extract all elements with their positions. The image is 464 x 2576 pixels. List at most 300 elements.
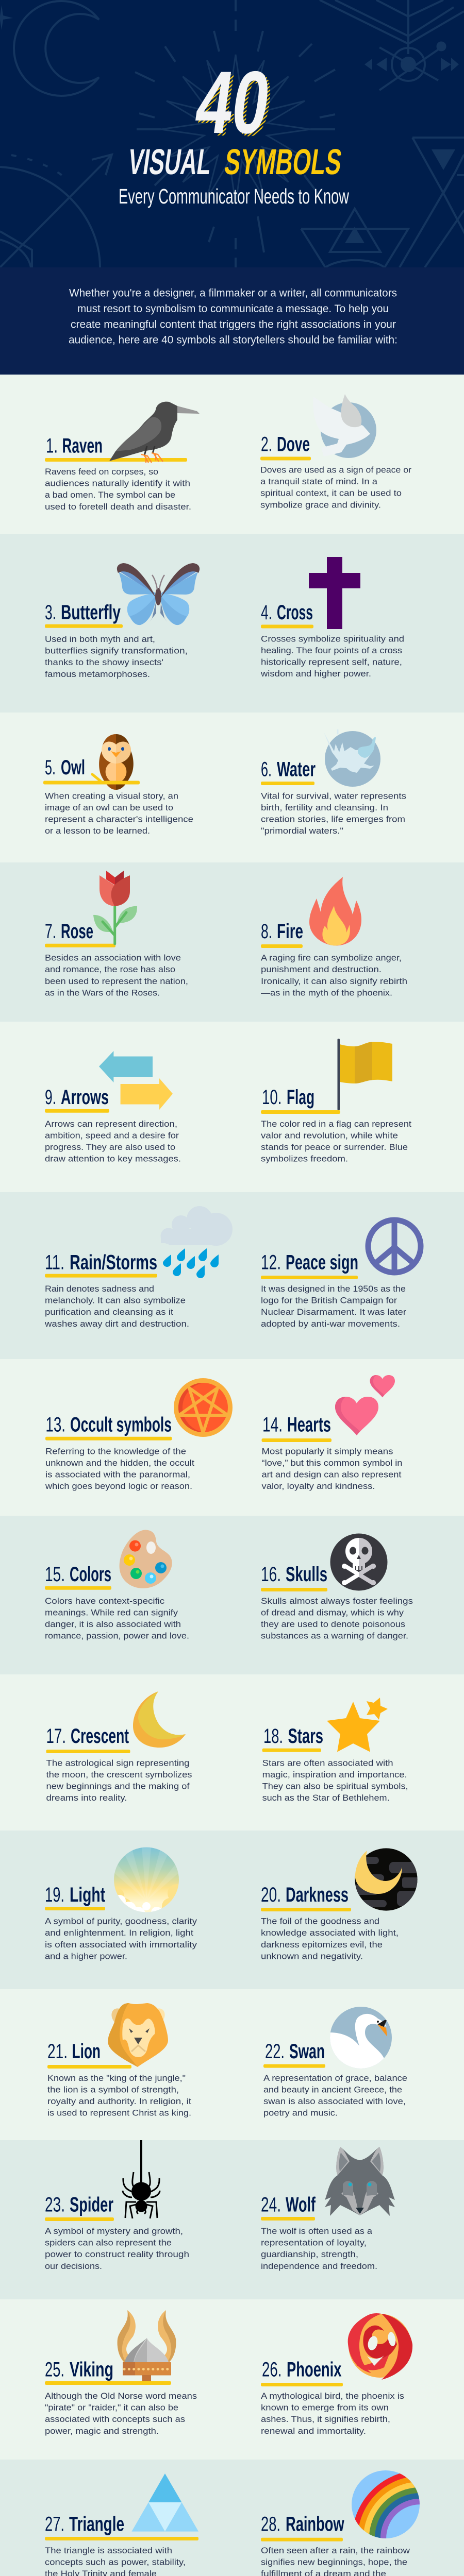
- body text: [261, 1284, 406, 1329]
- body text: “love,” but this common symbol in: [262, 1458, 402, 1468]
- panel: 1. Raven: [45, 402, 200, 512]
- body text: When creating a visual story, an: [45, 791, 178, 801]
- body text: [261, 1596, 413, 1641]
- heading: 6. Water: Water: [277, 758, 316, 781]
- body text: butterflies signify transformation,: [45, 646, 188, 656]
- body text: Nuclear Disarmament. It was later: [261, 1307, 406, 1317]
- body text: Arrows can represent direction,: [45, 1119, 177, 1129]
- heading: 21. Lion: Lion: [72, 2040, 101, 2063]
- body text: famous metamorphoses.: [45, 669, 150, 679]
- body text: A symbol of mystery and growth,: [45, 2226, 183, 2236]
- body text: [261, 953, 407, 997]
- panel: 23. Spider: [45, 2140, 189, 2271]
- heading: 11. Rain/Storms: Rain/Storms: [70, 1251, 157, 1274]
- heading: 6. Water: [261, 758, 316, 781]
- heading: 23. Spider: [45, 2194, 113, 2216]
- heading: 5. Owl: 5.: [45, 756, 56, 779]
- body text: stands for peace or surrender. Blue: [261, 1142, 408, 1152]
- icon: light: [108, 1847, 186, 1921]
- underline: [260, 456, 311, 461]
- body text: which goes beyond logic or reason.: [45, 1481, 192, 1491]
- heading: 12. Peace sign: Peace sign: [286, 1251, 358, 1274]
- body text: Colors have context-specific: [45, 1596, 165, 1606]
- panel: 18. Stars: [262, 1698, 408, 1803]
- body text: [45, 634, 188, 679]
- body text: magic, inspiration and importance.: [262, 1770, 407, 1780]
- body text: or a lesson to be learned.: [45, 826, 150, 836]
- heading: 27. Triangle: [45, 2513, 124, 2535]
- body text: The astrological sign representing: [46, 1758, 190, 1768]
- heading: 27. Triangle: 27.: [45, 2513, 64, 2535]
- underline: [45, 1586, 111, 1590]
- heading: 5. Owl: [45, 756, 85, 779]
- heading: 13. Occult symbols: [45, 1414, 172, 1436]
- icon: lion: [108, 2003, 168, 2067]
- panel: 6. Water: [261, 730, 406, 836]
- body text: Rain denotes sadness and: [45, 1284, 154, 1294]
- icon: wolf: [325, 2147, 395, 2216]
- heading: 14. Hearts: Hearts: [287, 1414, 331, 1436]
- heading: 14. Hearts: [262, 1414, 331, 1436]
- heading: 2. Dove: [261, 433, 310, 455]
- heading: 8. Fire: [261, 920, 303, 943]
- heading: 17. Crescent: Crescent: [71, 1725, 129, 1748]
- heading: 6. Water: 6.: [261, 758, 272, 781]
- body text: a bad omen. The symbol can be: [45, 490, 175, 500]
- intro panel: must resort to symbolism to communicate a message. To help you: [77, 303, 389, 315]
- heading: 20. Darkness: [261, 1884, 349, 1906]
- body text: and a higher power.: [45, 1951, 127, 1961]
- body text: The wolf is often used as a: [261, 2226, 373, 2236]
- heading: 4. Cross: 4.: [261, 601, 272, 624]
- body text: The triangle is associated with: [45, 2546, 172, 2555]
- heading: 7. Rose: 7.: [45, 920, 56, 943]
- underline: [261, 2383, 343, 2386]
- body text: darkness epitomizes evil, the: [261, 1940, 383, 1950]
- body text: [262, 1446, 402, 1491]
- body text: romance, passion, power and love.: [45, 1631, 189, 1641]
- heading: 13. Occult symbols: 13.: [45, 1414, 65, 1436]
- body text: Skulls almost always foster feelings: [261, 1596, 413, 1606]
- body text: the moon, the crescent symbolizes: [46, 1770, 192, 1780]
- body text: Known as the "king of the jungle,": [47, 2073, 186, 2083]
- panel: 28. Rainbow: [261, 2470, 464, 2576]
- body text: concepts such as power, stability,: [45, 2557, 186, 2567]
- body text: Crosses symbolize spirituality and: [261, 634, 404, 643]
- heading: 9. Arrows: Arrows: [61, 1086, 109, 1109]
- icon: phoenix: [348, 2313, 412, 2380]
- body text: our decisions.: [45, 2261, 102, 2271]
- body text: [45, 1446, 194, 1491]
- body text: A symbol of purity, goodness, clarity: [45, 1917, 197, 1926]
- heading: 2. Dove: 2.: [261, 433, 272, 455]
- body text: Used in both myth and art,: [45, 634, 155, 644]
- panel: 22. Swan: [263, 2007, 407, 2118]
- icon: fire: [309, 877, 361, 946]
- body text: ambition, speed and a desire for: [45, 1130, 179, 1140]
- body text: as in the Wars of the Roses.: [45, 988, 160, 997]
- heading: 14. Hearts: 14.: [262, 1414, 283, 1436]
- body text: They can also be spiritual symbols,: [262, 1782, 408, 1791]
- body text: meanings. While red can signify: [45, 1607, 178, 1617]
- body text: represent a character's intelligence: [45, 815, 193, 824]
- body text: and romance, the rose has also: [45, 964, 175, 974]
- underline: [262, 1438, 332, 1442]
- heading: 26. Phoenix: 26.: [262, 2358, 281, 2381]
- heading: 22. Swan: [265, 2040, 325, 2063]
- heading: 22. Swan: 22.: [265, 2040, 285, 2063]
- body text: the lion is a symbol of strength,: [47, 2084, 179, 2094]
- heading: 16. Skulls: 16.: [261, 1563, 281, 1586]
- body text: used to foretell death and disaster.: [45, 502, 191, 512]
- body text: valor and revolution, while white: [261, 1130, 398, 1140]
- heading: 17. Crescent: [46, 1725, 129, 1748]
- heading: 28. Rainbow: 28.: [261, 2513, 280, 2535]
- heading: 25. Viking: [45, 2358, 113, 2381]
- body text: [261, 1119, 411, 1164]
- body text: [45, 2226, 189, 2271]
- underline: [45, 624, 123, 628]
- icon: swan: [330, 2007, 392, 2071]
- underline: [261, 2538, 343, 2541]
- body text: —as in the myth of the phoenix.: [261, 988, 392, 997]
- body text: and enlightenment. In religion, light: [45, 1928, 193, 1938]
- body text: [261, 1917, 399, 1961]
- icon: crescent moon: [133, 1691, 186, 1748]
- heading: 13. Occult symbols: Occult symbols: [70, 1414, 172, 1436]
- underline: [43, 781, 140, 784]
- body text: Vital for survival, water represents: [261, 791, 406, 801]
- body text: Referring to the knowledge of the: [45, 1446, 186, 1456]
- title: visual symbols: [126, 141, 344, 182]
- body text: The color red in a flag can represent: [261, 1119, 411, 1129]
- heading: 4. Cross: Cross: [277, 601, 313, 624]
- panel: 17. Crescent: [46, 1691, 192, 1803]
- body text: a tranquil state of mind. In a: [260, 477, 378, 486]
- intro panel: [0, 267, 464, 375]
- body text: wisdom and higher power.: [260, 669, 371, 679]
- heading: 8. Fire: Fire: [277, 920, 303, 943]
- heading: 20. Darkness: 20.: [261, 1884, 281, 1906]
- body text: [44, 1284, 189, 1329]
- body text: [47, 2073, 191, 2118]
- heading: 24. Wolf: 24.: [261, 2194, 281, 2216]
- heading: 26. Phoenix: Phoenix: [287, 2358, 341, 2381]
- heading: 1. Raven: [46, 435, 103, 457]
- heading: 3. Butterfly: 3.: [45, 601, 56, 624]
- body text: of dread and dismay, which is why: [261, 1607, 404, 1617]
- heading: 18. Stars: 18.: [263, 1725, 283, 1748]
- underline: [263, 2064, 325, 2068]
- body text: [261, 2391, 404, 2436]
- body text: logo for the British Campaign for: [261, 1296, 397, 1306]
- heading: 2. Dove: Dove: [277, 433, 310, 455]
- body text: royalty and authority. In religion, it: [47, 2096, 191, 2106]
- underline: [262, 1749, 321, 1752]
- heading: 23. Spider: Spider: [70, 2194, 113, 2216]
- body text: poetry and music.: [263, 2108, 338, 2118]
- icon: hearts: [335, 1375, 395, 1435]
- icon: palette: [120, 1530, 172, 1588]
- heading: 10. Flag: 10.: [262, 1086, 281, 1109]
- body text: such as the Star of Bethlehem.: [262, 1793, 390, 1803]
- body text: "pirate" or "raider," it can also be: [45, 2403, 178, 2413]
- heading: 9. Arrows: 9.: [45, 1086, 56, 1109]
- body text: image of an owl can be used to: [45, 803, 173, 812]
- icon: flag: [337, 1039, 392, 1110]
- heading: 11. Rain/Storms: [45, 1251, 157, 1274]
- body text: [45, 2546, 186, 2576]
- body text: and beauty in ancient Greece, the: [263, 2084, 402, 2094]
- body text: thanks to the showy insects': [45, 657, 163, 667]
- underline: [45, 458, 187, 462]
- icon: spider: [123, 2140, 160, 2218]
- body text: Although the Old Norse word means: [45, 2391, 197, 2401]
- body text: substances as a warning of danger.: [261, 1631, 408, 1641]
- heading: 17. Crescent: 17.: [46, 1725, 66, 1748]
- heading: 15. Colors: 15.: [45, 1563, 65, 1586]
- underline: [46, 1750, 130, 1753]
- body text: is often associated with immortality: [45, 1940, 197, 1950]
- icon: stars: [327, 1698, 388, 1752]
- intro panel: create meaningful content that triggers the right associations in your: [71, 318, 396, 330]
- heading: 23. Spider: 23.: [45, 2194, 65, 2216]
- heading: 19. Light: 19.: [45, 1884, 64, 1906]
- panel: 27. Triangle: [45, 2473, 198, 2576]
- heading: 12. Peace sign: [261, 1251, 358, 1274]
- body text: Often seen after a rain, the rainbow: [261, 2546, 410, 2555]
- title: visual symbols: VISUAL: [126, 141, 214, 182]
- body text: Ironically, it can also signify rebirth: [261, 976, 407, 986]
- body text: creation stories, life emerges from: [261, 815, 405, 824]
- heading: 16. Skulls: [261, 1563, 327, 1586]
- underline: [261, 1908, 351, 1911]
- body text: It was designed in the 1950s as the: [261, 1284, 406, 1294]
- body text: "primordial waters.": [261, 826, 343, 836]
- body text: A representation of grace, balance: [263, 2073, 407, 2083]
- body text: [260, 634, 404, 679]
- underline: [47, 2065, 131, 2069]
- heading: 1. Raven: Raven: [62, 435, 103, 457]
- underline: [261, 944, 303, 948]
- heading: 8. Fire: 8.: [261, 920, 272, 943]
- panel: 8. Fire: [261, 877, 407, 997]
- header background: [0, 0, 464, 267]
- body text: independence and freedom.: [261, 2261, 377, 2271]
- heading: 7. Rose: [45, 920, 93, 943]
- heading: 18. Stars: Stars: [288, 1725, 323, 1748]
- body text: power to construct reality through: [45, 2249, 189, 2259]
- heading: 4. Cross: [261, 601, 313, 624]
- body text: swan is also associated with love,: [263, 2096, 406, 2106]
- body text: ashes. Thus, it signifies rebirth,: [261, 2414, 390, 2424]
- title: 40: 40: [193, 56, 279, 155]
- body text: [45, 1917, 197, 1961]
- subtitle: Every Communicator Needs to Know: [119, 184, 349, 208]
- icon: owl: [92, 734, 134, 790]
- heading: 3. Butterfly: [45, 601, 121, 624]
- heading: 1. Raven: 1.: [46, 435, 58, 457]
- icon: dove: [313, 394, 376, 458]
- panel: 19. Light: [45, 1847, 197, 1961]
- body text: audiences naturally identify it with: [45, 479, 190, 488]
- heading: 15. Colors: [45, 1563, 111, 1586]
- body text: danger, it is also associated with: [45, 1619, 181, 1629]
- body text: symbolize grace and divinity.: [260, 500, 381, 510]
- body text: renewal and immortality.: [261, 2426, 366, 2436]
- body text: [261, 791, 406, 836]
- body text: birth, fertility and cleansing. In: [261, 803, 388, 812]
- panel: 3. Butterfly: [45, 563, 200, 679]
- panel: 25. Viking: [45, 2310, 197, 2436]
- body text: known to emerge from its own: [261, 2403, 389, 2413]
- underline: [45, 2381, 171, 2385]
- heading: 27. Triangle: Triangle: [69, 2513, 124, 2535]
- body text: punishment and destruction.: [261, 964, 382, 974]
- body text: [45, 467, 191, 512]
- underline: [45, 944, 115, 947]
- body text: symbolizes freedom.: [261, 1154, 348, 1164]
- body text: valor, loyalty and kindness.: [262, 1481, 375, 1491]
- heading: 20. Darkness: Darkness: [286, 1884, 349, 1906]
- icon: butterfly: [117, 563, 200, 625]
- heading: 9. Arrows: [45, 1086, 109, 1109]
- icon: rose: [93, 871, 137, 944]
- panel: 24. Wolf: [261, 2147, 395, 2271]
- underline: [45, 1437, 172, 1440]
- icon: rain cloud: [161, 1206, 233, 1278]
- title: visual symbols: SYMBOLS: [222, 141, 344, 182]
- body text: unknown and negativity.: [261, 1951, 363, 1961]
- heading: 25. Viking: 25.: [45, 2358, 64, 2381]
- body text: [46, 1758, 192, 1803]
- body text: Stars are often associated with: [262, 1758, 393, 1768]
- icon: skull: [330, 1533, 388, 1591]
- panel: 14. Hearts: [262, 1375, 402, 1491]
- heading: 16. Skulls: Skulls: [286, 1563, 327, 1586]
- heading: 21. Lion: 21.: [47, 2040, 68, 2063]
- body text: knowledge associated with light,: [261, 1928, 399, 1938]
- underline: [45, 1907, 105, 1910]
- body text: [45, 953, 188, 997]
- body text: [262, 1758, 408, 1803]
- panel: 26. Phoenix: [261, 2313, 412, 2436]
- body text: [45, 791, 193, 836]
- body text: spiritual context, it can be used to: [260, 488, 402, 498]
- body text: art and design can also represent: [262, 1469, 402, 1480]
- heading: 24. Wolf: Wolf: [286, 2194, 316, 2216]
- panel: 9. Arrows: [45, 1051, 181, 1164]
- heading: 7. Rose: Rose: [61, 920, 93, 943]
- body text: dreams into reality.: [46, 1793, 127, 1803]
- title: 40: 40: [190, 53, 276, 152]
- icon: water: [324, 730, 380, 787]
- heading: 5. Owl: Owl: [61, 756, 85, 779]
- body text: been used to represent the nation,: [45, 976, 188, 986]
- panel: 7. Rose: [45, 871, 188, 997]
- panel: 21. Lion: [47, 2003, 191, 2118]
- body text: spiders can also represent the: [45, 2238, 172, 2248]
- body text: melancholy. It can also symbolize: [45, 1296, 186, 1306]
- intro panel: Whether you're a designer, a filmmaker or a writer, all communicators: [69, 287, 397, 299]
- body text: is associated with the paranormal,: [45, 1469, 190, 1480]
- icon: peace sign: [368, 1220, 421, 1273]
- body text: [263, 2073, 407, 2118]
- underline: [261, 1276, 358, 1279]
- body text: A raging fire can symbolize anger,: [261, 953, 402, 963]
- body text: new beginnings and the making of: [46, 1782, 190, 1791]
- heading: 15. Colors: Colors: [70, 1563, 111, 1586]
- heading: 21. Lion: [47, 2040, 101, 2063]
- icon: raven: [109, 402, 200, 463]
- heading: 26. Phoenix: [262, 2358, 341, 2381]
- underline: [261, 1588, 327, 1591]
- heading: 19. Light: Light: [70, 1884, 105, 1906]
- panel: 2. Dove: [260, 394, 411, 510]
- icon: pentagram: [174, 1378, 233, 1437]
- icon: rainbow: [352, 2470, 464, 2576]
- underline: [261, 2217, 315, 2221]
- underline: [261, 1110, 340, 1114]
- underline: [261, 624, 313, 629]
- body text: progress. They are also used to: [45, 1142, 175, 1152]
- panel: 20. Darkness: [261, 1848, 423, 1961]
- body text: [261, 2546, 410, 2576]
- panel: 12. Peace sign: [261, 1220, 421, 1329]
- body text: [261, 2226, 377, 2271]
- underline: [45, 1274, 157, 1278]
- body text: signifies new beginnings, hope, the: [261, 2557, 407, 2567]
- body text: representation of loyalty,: [261, 2238, 367, 2248]
- body text: Besides an association with love: [45, 953, 181, 963]
- body text: purification and cleansing as it: [45, 1307, 173, 1317]
- heading: 10. Flag: Flag: [287, 1086, 314, 1109]
- panel: 15. Colors: [45, 1530, 189, 1641]
- heading: 11. Rain/Storms: 11.: [45, 1251, 64, 1274]
- heading: 28. Rainbow: [261, 2513, 344, 2535]
- panel: 13. Occult symbols: [45, 1378, 233, 1491]
- body text: power, magic and strength.: [45, 2426, 159, 2436]
- underline: [261, 782, 314, 785]
- body text: unknown and the hidden, the occult: [45, 1458, 194, 1468]
- body text: A mythological bird, the phoenix is: [261, 2391, 404, 2401]
- body text: [260, 465, 411, 510]
- heading: 12. Peace sign: 12.: [261, 1251, 281, 1274]
- heading: 25. Viking: Viking: [70, 2358, 113, 2381]
- panel: 10. Flag: [261, 1039, 411, 1164]
- icon: darkness: [351, 1848, 423, 1911]
- heading: 24. Wolf: [261, 2194, 316, 2216]
- body text: is used to represent Christ as king.: [47, 2108, 191, 2118]
- panel: 11. Rain/Storms: [44, 1206, 233, 1329]
- heading: 18. Stars: [263, 1725, 323, 1748]
- icon: cross: [309, 557, 360, 629]
- heading: 3. Butterfly: Butterfly: [61, 601, 121, 624]
- icon: viking helmet: [118, 2310, 176, 2381]
- body text: adopted by anti-war movements.: [261, 1319, 400, 1329]
- body text: historically represent self, nature,: [261, 657, 402, 667]
- panel: 5. Owl: [43, 734, 193, 836]
- icon: triangle: [131, 2473, 198, 2532]
- icon: arrows: [99, 1051, 173, 1110]
- body text: Doves are used as a sign of peace or: [260, 465, 411, 475]
- body text: [45, 1119, 181, 1164]
- heading: 22. Swan: Swan: [289, 2040, 325, 2063]
- decorative line art: [0, 0, 464, 267]
- underline: [45, 2217, 114, 2221]
- body text: [45, 1596, 189, 1641]
- heading: 28. Rainbow: Rainbow: [286, 2513, 344, 2535]
